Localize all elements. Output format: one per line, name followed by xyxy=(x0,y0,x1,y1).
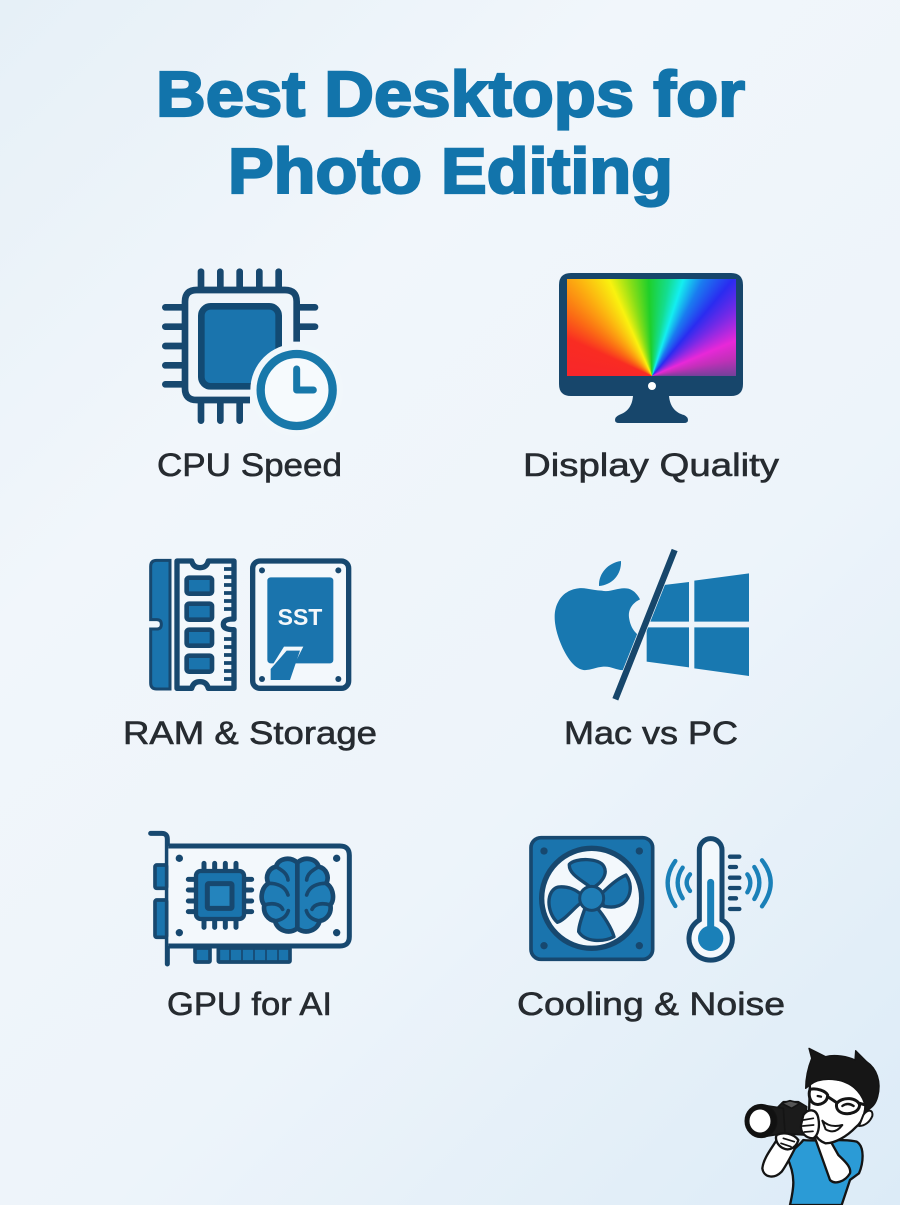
label: Display Quality xyxy=(523,447,780,483)
right arm xyxy=(813,1128,850,1182)
camera body xyxy=(777,1102,807,1135)
label: Mac vs PC xyxy=(564,715,738,751)
icon: CPU with clock xyxy=(165,272,343,436)
title: Best Desktops for xyxy=(156,58,745,130)
hands xyxy=(801,1110,819,1138)
panel: Cooling & Noise xyxy=(517,838,785,1022)
icon text: SST: SST xyxy=(278,604,322,630)
hair xyxy=(806,1048,879,1112)
icon: fan xyxy=(531,838,653,959)
panel: Mac vs PC xyxy=(555,550,749,751)
icon: thermometer with sound waves xyxy=(668,839,771,960)
title: Photo Editing xyxy=(228,135,673,207)
mascot: photographer xyxy=(745,1048,879,1205)
icon: brain xyxy=(262,859,333,931)
camera lens xyxy=(762,1105,785,1137)
left arm xyxy=(762,1140,797,1176)
label: Cooling & Noise xyxy=(517,986,785,1022)
icon: RAM module xyxy=(151,560,234,689)
panel: Display Quality xyxy=(523,273,780,483)
panel: GPU for AI xyxy=(151,833,349,1022)
label: GPU for AI xyxy=(167,986,332,1022)
eyes and smile xyxy=(818,1096,854,1106)
icon: graphics card xyxy=(151,833,349,964)
panel: RAM & Storage xyxy=(123,560,377,751)
shirt xyxy=(787,1140,863,1205)
icon: SSD xyxy=(253,561,349,688)
panel: CPU Speed xyxy=(157,272,343,483)
finger lines xyxy=(781,1118,814,1147)
icon: monitor xyxy=(559,273,743,423)
face xyxy=(809,1078,865,1143)
title xyxy=(156,58,745,207)
icon: Apple and Windows split xyxy=(555,550,749,699)
label: RAM & Storage xyxy=(123,715,377,751)
ear xyxy=(859,1111,872,1126)
label: CPU Speed xyxy=(157,447,342,483)
glasses xyxy=(809,1089,866,1114)
